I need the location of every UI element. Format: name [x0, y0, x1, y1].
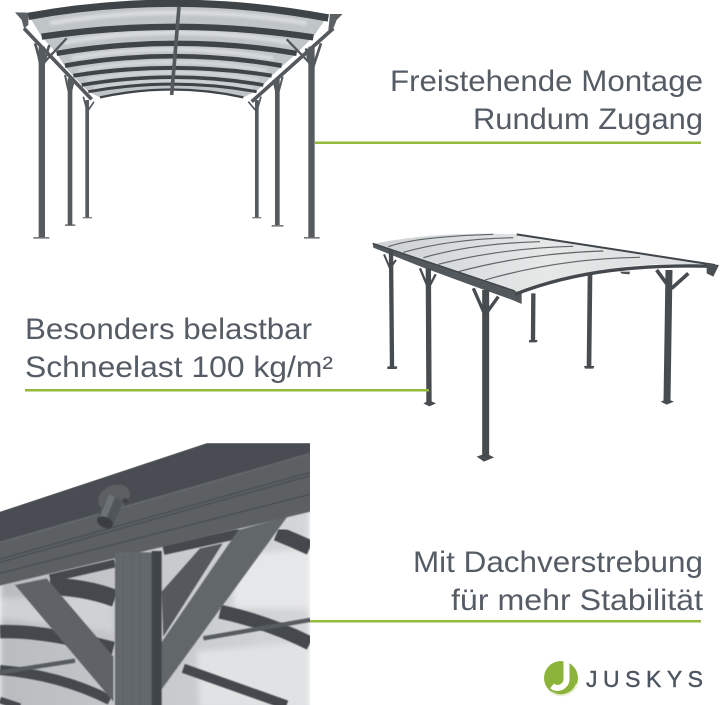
logo: Juskys: JUSKYS — [586, 666, 703, 692]
heading: Freistehende Montage: Rundum Zugang — [473, 103, 703, 136]
diagonal struts — [15, 578, 113, 702]
right posts — [252, 47, 320, 239]
heading: Besonders belastbar — [25, 313, 333, 384]
heading: Freistehende Montage: Freistehende Montage — [390, 65, 703, 98]
green rule 2 — [25, 389, 429, 392]
thin rods — [0, 619, 313, 673]
gutter beam — [0, 443, 313, 544]
heading: Freistehende Montage — [390, 65, 703, 136]
heading: Mit Dachverstrebung — [413, 546, 704, 617]
heading: Mit Dachverstrebung: Mit Dachverstrebung — [413, 546, 703, 579]
photo: roof bracket close-up — [0, 443, 313, 705]
post bases — [387, 340, 674, 462]
green rule 3 — [310, 620, 701, 622]
photo: carport front view — [15, 2, 343, 239]
posts — [384, 250, 688, 457]
downspout — [98, 484, 130, 508]
left posts — [33, 47, 92, 239]
icon: J in green circle — [544, 661, 578, 695]
heading: Besonders belastbar: Besonders belastbar — [25, 313, 312, 346]
photo: carport perspective view — [373, 234, 719, 462]
logo: Juskys — [544, 661, 703, 695]
heading: Mit Dachverstrebung: für mehr Stabilität — [451, 584, 704, 617]
post — [115, 552, 152, 705]
heading: Besonders belastbar: Schneelast 100 kg/m² — [25, 351, 333, 384]
green rule 1 — [315, 142, 701, 144]
